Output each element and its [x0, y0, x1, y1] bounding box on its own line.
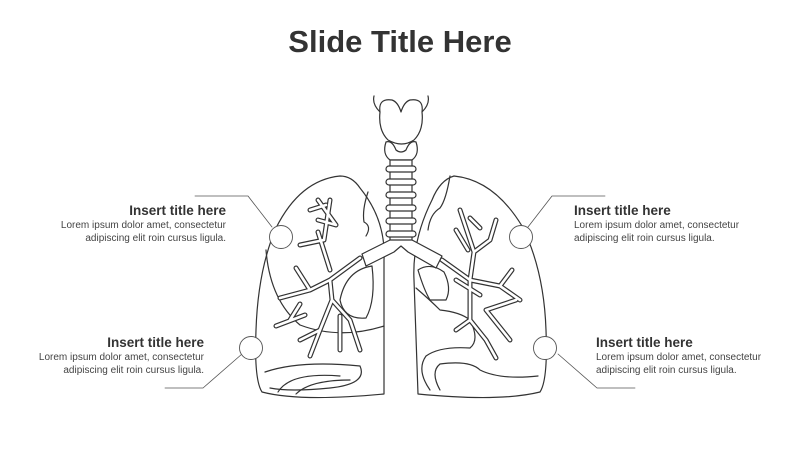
callout: top right [574, 203, 739, 244]
heading: bottom right: Insert title here [596, 335, 693, 350]
text: bottom right [596, 352, 761, 376]
marker circles [240, 226, 556, 360]
callout: top left [61, 203, 226, 244]
callout: bottom right [596, 335, 761, 376]
text: bottom left: adipiscing elit roin cursus ligula. [63, 365, 204, 376]
text: top right [574, 220, 739, 244]
text: top right: Lorem ipsum dolor amet, consectetur [574, 220, 739, 231]
title: Slide Title Here [288, 24, 512, 59]
connector lines [165, 196, 635, 388]
text: bottom left [39, 352, 204, 376]
text: top left: adipiscing elit roin cursus ligula. [85, 233, 226, 244]
icon: thyroid and trachea [362, 96, 442, 268]
heading: bottom left: Insert title here [107, 335, 204, 350]
heading: top right: Insert title here [574, 203, 671, 218]
text: top right: adipiscing elit roin cursus ligula. [574, 233, 715, 244]
right lung [414, 176, 546, 398]
left lung [256, 176, 384, 398]
text: top left [61, 220, 226, 244]
text: bottom left: Lorem ipsum dolor amet, consectetur [39, 352, 204, 363]
callout: bottom left [39, 335, 204, 376]
text: top left: Lorem ipsum dolor amet, consectetur [61, 220, 226, 231]
text: bottom right: Lorem ipsum dolor amet, consectetur [596, 352, 761, 363]
text: bottom right: adipiscing elit roin cursus ligula. [596, 365, 737, 376]
heading: top left: Insert title here [129, 203, 226, 218]
